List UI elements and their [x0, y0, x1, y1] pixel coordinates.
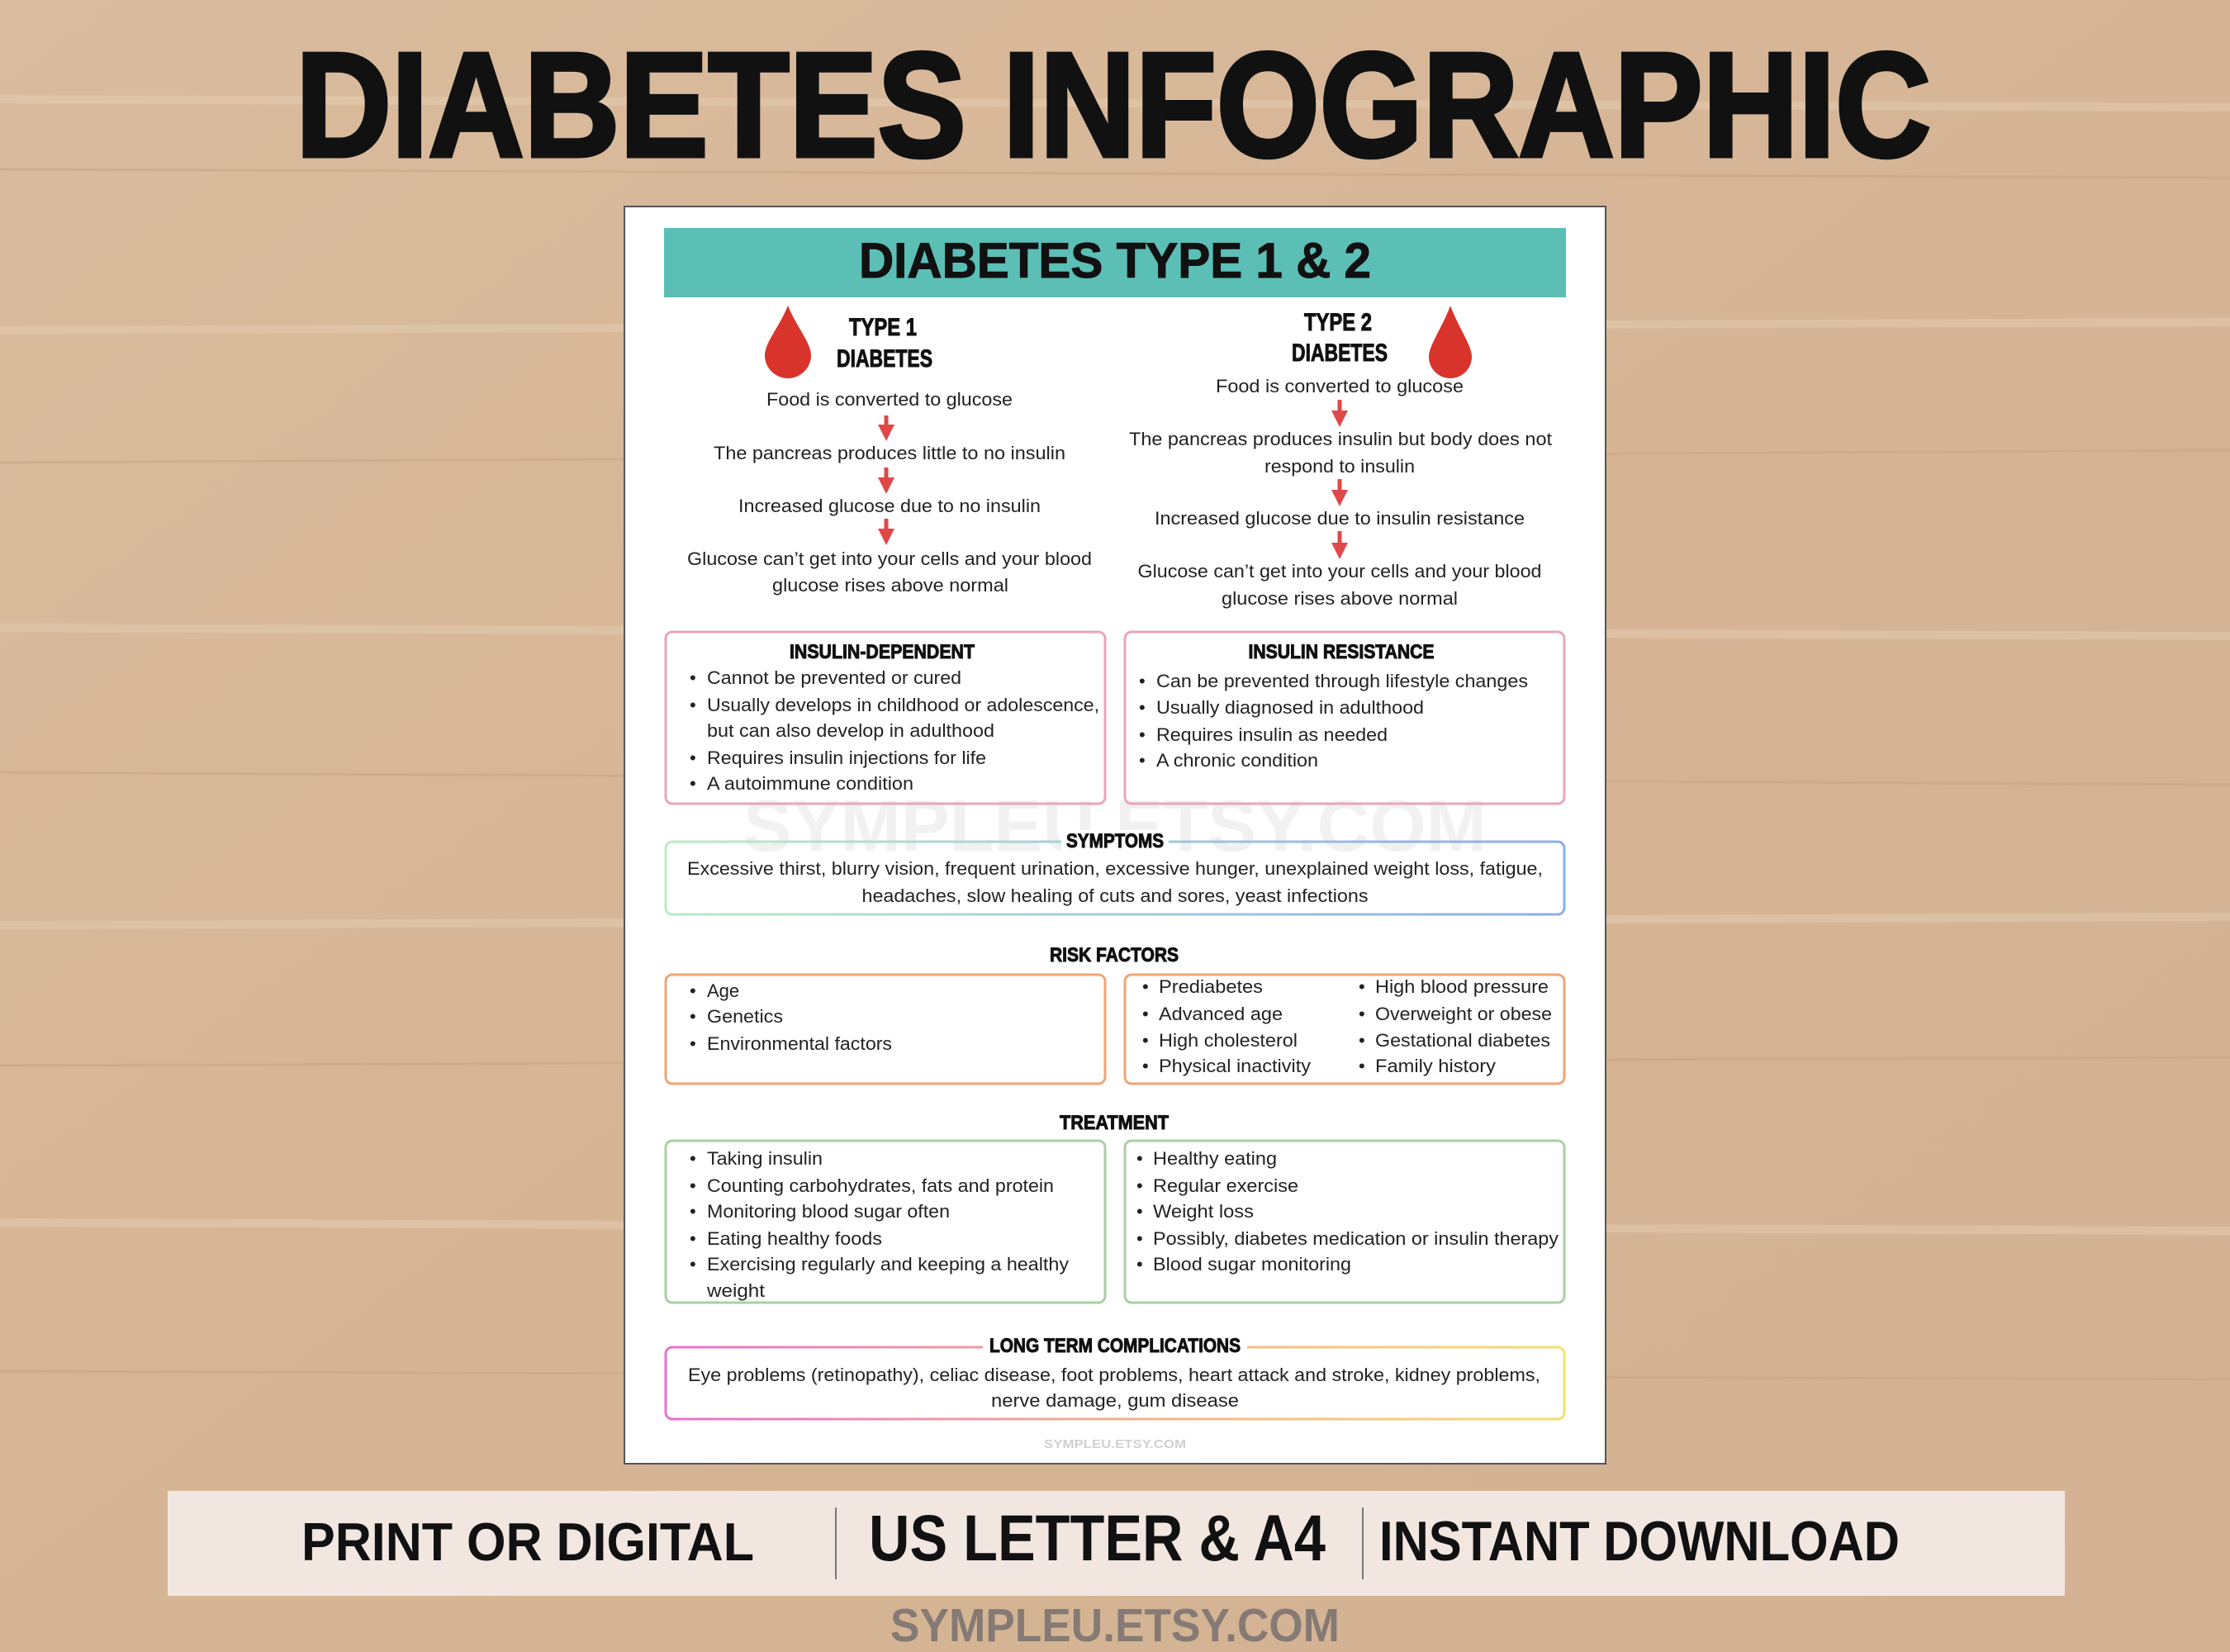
panel: insulin resistance: INSULIN RESISTANCE [1249, 641, 1434, 663]
header band: diabetes type 1 & 2 [664, 228, 1566, 297]
type 2 heading: DIABETES [1292, 339, 1388, 367]
panel: risk factors type 2: Overweight or obese [1375, 1004, 1552, 1024]
panel: symptoms [666, 830, 1564, 914]
panel: treatment type 2 [1125, 1141, 1564, 1303]
panel: insulin-dependent: • [690, 748, 696, 768]
type 1 heading: DIABETES [837, 345, 932, 373]
heading: risk factors: RISK FACTORS [1050, 944, 1179, 966]
panel: symptoms: SYMPTOMS [1066, 830, 1164, 852]
type 1 flow: The pancreas produces little to no insulin [714, 443, 1065, 463]
panel: insulin resistance: • [1139, 671, 1146, 691]
type 2 heading [1292, 309, 1388, 367]
type 2 flow: Food is converted to glucose [1216, 376, 1464, 396]
bottom watermark url: SYMPLEU.ETSY.COM [890, 1599, 1340, 1652]
paper sheet [624, 206, 1606, 1464]
panel: insulin-dependent: A autoimmune condition [707, 773, 913, 794]
type 1 flow: Food is converted to glucose [766, 389, 1013, 410]
panel: treatment type 1: • [690, 1201, 696, 1222]
panel: risk factors type 2: Prediabetes [1159, 976, 1263, 997]
icon: blood drop type 1 [765, 306, 811, 378]
panel: insulin-dependent: but can also develop in adulthood [707, 720, 994, 741]
panel: treatment type 2: • [1136, 1254, 1143, 1275]
type 2 flow: The pancreas produces insulin but body does not [1129, 429, 1552, 449]
panel: treatment type 2: • [1136, 1175, 1143, 1196]
panel: insulin-dependent: • [690, 773, 696, 794]
bottom banner: INSTANT DOWNLOAD [1379, 1510, 1900, 1573]
panel: long term complications: nerve damage, gum disease [991, 1390, 1239, 1411]
panel: risk factors type 2: Family history [1375, 1056, 1496, 1076]
panel: insulin-dependent [666, 632, 1105, 804]
title: DIABETES INFOGRAPHIC [296, 22, 1931, 188]
type 2 flow: Increased glucose due to insulin resistance [1155, 508, 1525, 529]
panel: treatment type 1: • [690, 1175, 696, 1196]
type 2 flow: glucose rises above normal [1222, 588, 1458, 609]
panel: insulin-dependent: • [690, 695, 696, 715]
panel: treatment type 1: • [690, 1148, 696, 1169]
panel: risk factors type 1: Environmental factors [707, 1033, 892, 1054]
panel: risk factors type 2: Physical inactivity [1159, 1056, 1311, 1076]
panel: risk factors type 2: • [1359, 1004, 1365, 1024]
panel: treatment type 1: • [690, 1228, 696, 1249]
panel: insulin-dependent: INSULIN-DEPENDENT [790, 641, 975, 663]
panel: treatment type 1: Taking insulin [707, 1148, 823, 1169]
panel: risk factors type 2: High cholesterol [1159, 1030, 1298, 1051]
panel: treatment type 1: Eating healthy foods [707, 1228, 882, 1249]
type 1 column [687, 306, 1092, 596]
panel: insulin-dependent: Usually develops in childhood or adolescence, [707, 695, 1099, 715]
panel: treatment type 2: • [1136, 1201, 1143, 1222]
panel: long term complications: LONG TERM COMPLICATIONS [989, 1335, 1241, 1357]
type 1 flow: glucose rises above normal [772, 575, 1008, 596]
panel: treatment type 1: • [690, 1254, 696, 1275]
panel: risk factors type 2: Gestational diabetes [1375, 1030, 1550, 1051]
panel: treatment type 2: Healthy eating [1153, 1148, 1277, 1169]
panel: symptoms: Excessive thirst, blurry vision, frequent urination, excessive hunger, unexplained weight loss, fatigue, [687, 858, 1543, 879]
panel: risk factors type 1: • [690, 1033, 696, 1054]
heading: treatment: TREATMENT [1060, 1112, 1169, 1134]
panel: treatment type 1: Exercising regularly and keeping a healthy [707, 1254, 1069, 1275]
panel: insulin-dependent: • [690, 667, 696, 688]
type 1 flow: Glucose can’t get into your cells and your blood [687, 548, 1092, 569]
panel: insulin resistance: Can be prevented through lifestyle changes [1156, 671, 1528, 691]
type 1 heading [837, 314, 932, 373]
panel: symptoms: headaches, slow healing of cuts and sores, yeast infections [862, 885, 1368, 906]
panel: risk factors type 2: • [1359, 976, 1365, 997]
panel: risk factors type 1 [666, 975, 1105, 1084]
type 1 flow: Increased glucose due to no insulin [738, 496, 1041, 516]
panel: insulin-dependent: Cannot be prevented or cured [707, 667, 961, 688]
panel: risk factors type 2 [1125, 975, 1564, 1084]
panel: risk factors type 2: Advanced age [1159, 1004, 1283, 1024]
panel: insulin resistance: Requires insulin as needed [1156, 724, 1388, 745]
bottom banner [168, 1491, 2065, 1596]
panel: risk factors type 2: High blood pressure [1375, 976, 1549, 997]
bottom banner: PRINT OR DIGITAL [301, 1512, 754, 1572]
panel: insulin resistance: • [1139, 724, 1146, 745]
panel: risk factors type 1: Genetics [707, 1006, 783, 1027]
type 2 column [1129, 306, 1552, 609]
panel: treatment type 1: weight [706, 1280, 765, 1301]
panel: insulin resistance: Usually diagnosed in adulthood [1156, 697, 1424, 718]
panel: insulin resistance [1125, 632, 1564, 804]
panel: treatment type 2: Possibly, diabetes medication or insulin therapy [1153, 1228, 1559, 1249]
panel: risk factors type 2: • [1359, 1056, 1365, 1076]
panel: risk factors type 2: • [1142, 1056, 1149, 1076]
type 2 flow: Glucose can’t get into your cells and your blood [1138, 561, 1541, 582]
panel: insulin resistance: • [1139, 697, 1146, 718]
panel: risk factors type 2: • [1142, 1030, 1149, 1051]
header band: diabetes type 1 & 2: DIABETES TYPE 1 & 2 [859, 233, 1371, 288]
panel: treatment type 1: Counting carbohydrates, fats and protein [707, 1175, 1054, 1196]
panel: risk factors type 1: • [690, 980, 696, 1001]
panel: treatment type 2: • [1136, 1148, 1143, 1169]
panel: risk factors type 2: • [1142, 1004, 1149, 1024]
panel: treatment type 2: Weight loss [1153, 1201, 1254, 1222]
type 1 flow [687, 389, 1092, 596]
footer url on sheet: SYMPLEU.ETSY.COM [1044, 1437, 1186, 1451]
panel: long term complications: Eye problems (retinopathy), celiac disease, foot problems, heart attack and stroke, kidney problems, [688, 1365, 1540, 1385]
panel: insulin resistance: • [1139, 750, 1146, 771]
panel: insulin resistance: A chronic condition [1156, 750, 1318, 771]
panel: insulin-dependent: Requires insulin injections for life [707, 748, 986, 768]
panel: long term complications [666, 1335, 1564, 1419]
panel: risk factors type 2: • [1359, 1030, 1365, 1051]
type 2 heading: TYPE 2 [1304, 309, 1372, 336]
panel: risk factors type 2: • [1142, 976, 1149, 997]
type 2 flow [1129, 376, 1552, 609]
panel: treatment type 2: • [1136, 1228, 1143, 1249]
type 1 heading: TYPE 1 [849, 314, 917, 341]
panel: treatment type 1: Monitoring blood sugar often [707, 1201, 950, 1222]
panel: treatment type 2: Regular exercise [1153, 1175, 1298, 1196]
panel: treatment type 1 [666, 1141, 1105, 1303]
panel: risk factors type 1: Age [707, 980, 739, 1001]
bottom banner: US LETTER & A4 [869, 1501, 1326, 1574]
watermark: SYMPLEU.ETSY.COM [743, 785, 1487, 866]
type 2 flow: respond to insulin [1264, 456, 1415, 477]
panel: risk factors type 1: • [690, 1006, 696, 1027]
icon: blood drop type 2 [1429, 306, 1472, 378]
panel: treatment type 2: Blood sugar monitoring [1153, 1254, 1351, 1275]
